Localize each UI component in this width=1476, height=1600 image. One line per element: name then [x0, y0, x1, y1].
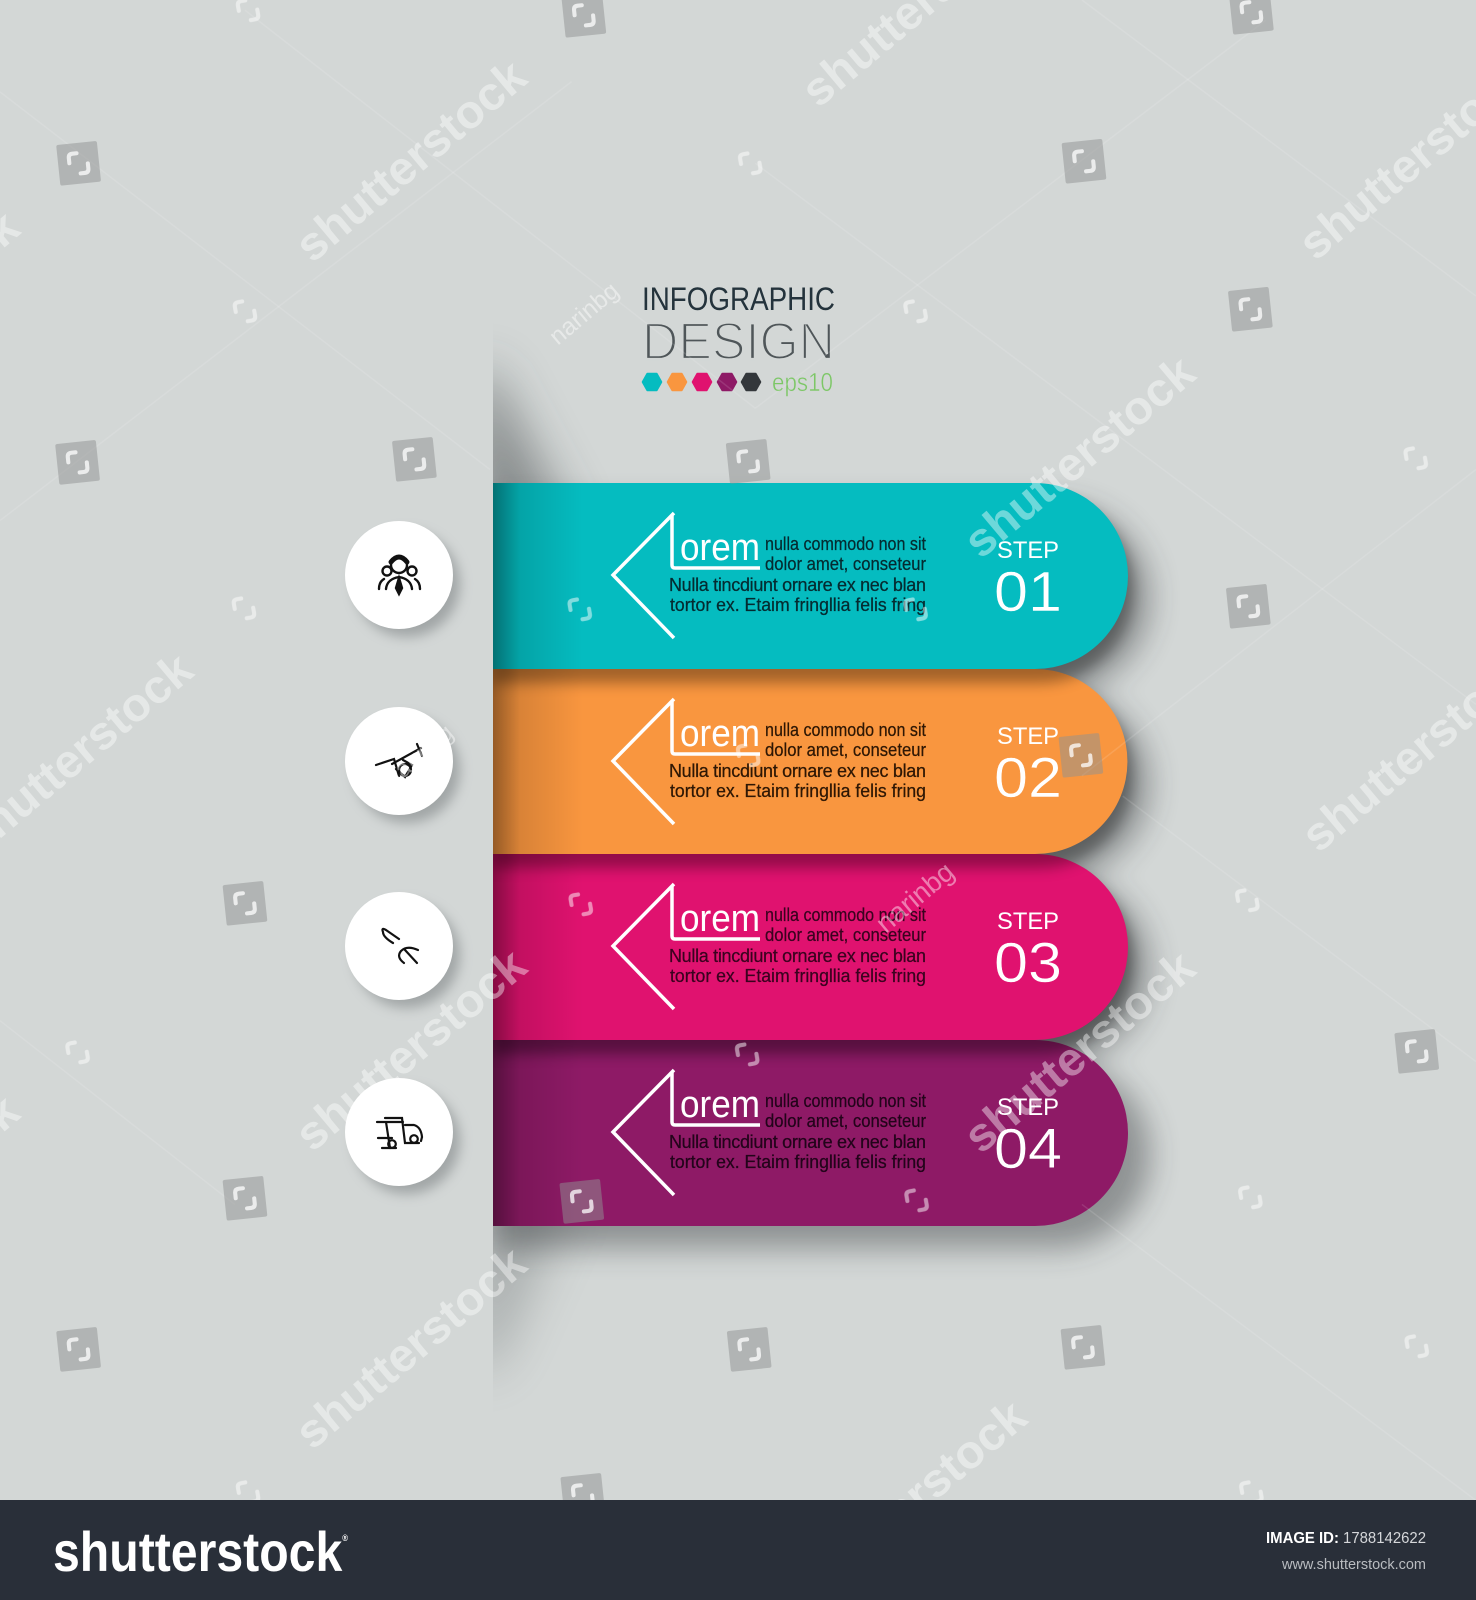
- icon circle: people: [345, 521, 460, 637]
- text: step 01 body: Nulla tincdiunt ornare ex nec blan: [669, 575, 926, 595]
- label: STEP 04: [994, 1094, 1062, 1181]
- text: step 01 body: nulla commodo non sit: [765, 534, 926, 554]
- footer logo: ®: [342, 1533, 348, 1543]
- text: step 02 body: dolor amet, conseteur: [765, 740, 926, 760]
- label: STEP 03: [994, 908, 1062, 995]
- panel: step 04 banner: [493, 1040, 1128, 1226]
- watermark overlay: narinbg: [379, 719, 459, 792]
- watermark overlay: shutterstock: [953, 344, 1205, 568]
- heading: step 04: orem: [680, 1084, 760, 1126]
- text: step 02 body: [669, 720, 926, 801]
- watermark overlay: shutterstock: [284, 1235, 537, 1459]
- text: step 04 body: Nulla tincdiunt ornare ex nec blan: [669, 1132, 926, 1152]
- icon circle: delivery truck: [345, 1078, 460, 1194]
- text: step 02 body: Nulla tincdiunt ornare ex nec blan: [669, 761, 926, 781]
- label: STEP 02: STEP: [997, 723, 1059, 750]
- icon circle: handshake: [345, 707, 460, 823]
- watermark overlay: shutterstock: [953, 939, 1205, 1163]
- label: STEP 02: 02: [994, 746, 1062, 810]
- image id: IMAGE ID: 1788142622: [1266, 1530, 1426, 1547]
- arrow: step 04: [613, 1070, 760, 1195]
- label: eps10: eps10: [772, 367, 833, 397]
- text: step 03 body: nulla commodo non sit: [765, 905, 926, 925]
- title: INFOGRAPHIC: [642, 281, 835, 317]
- footer bar: [0, 1500, 1476, 1600]
- label: STEP 01: [994, 537, 1062, 624]
- panel: step 03 banner: [493, 854, 1133, 1054]
- icon: colour hexagons: [643, 374, 760, 390]
- label: STEP 04: 04: [994, 1117, 1062, 1181]
- text: step 03 body: dolor amet, conseteur: [765, 925, 926, 945]
- text: step 04 body: [669, 1091, 926, 1172]
- text: step 03 body: Nulla tincdiunt ornare ex nec blan: [669, 946, 926, 966]
- label: STEP 03: STEP: [997, 908, 1059, 935]
- heading: step 03: orem: [680, 898, 760, 940]
- text: step 01 body: [669, 534, 926, 615]
- icon circle: plug: [345, 892, 460, 1008]
- arrow: step 02: [613, 699, 760, 824]
- label: STEP 01: 01: [994, 560, 1062, 624]
- label: STEP 02: [994, 723, 1062, 810]
- watermark overlay: narinbg: [544, 277, 624, 350]
- label: STEP 01: STEP: [997, 537, 1059, 564]
- title: [642, 281, 835, 397]
- title: DESIGN: [642, 313, 835, 371]
- footer logo: shutterstock: [53, 1520, 389, 1583]
- text: step 02 body: nulla commodo non sit: [765, 720, 926, 740]
- text: step 01 body: tortor ex. Etaim fringllia felis fring: [670, 595, 926, 615]
- text: step 03 body: tortor ex. Etaim fringllia felis fring: [670, 966, 926, 986]
- text: step 04 body: nulla commodo non sit: [765, 1091, 926, 1111]
- watermark overlay: shutterstock: [284, 937, 537, 1161]
- heading: step 02: orem: [680, 713, 760, 755]
- panel: step 02 banner: [493, 669, 1132, 868]
- arrow: step 03: [613, 884, 760, 1009]
- text: step 01 body: dolor amet, conseteur: [765, 554, 926, 574]
- left panel: [0, 0, 493, 1500]
- panel: step 01 banner: [493, 483, 1133, 683]
- text: step 03 body: [669, 905, 926, 986]
- watermark overlay: narinbg: [870, 856, 960, 939]
- label: STEP 03: 03: [994, 931, 1062, 995]
- arrow: step 01: [613, 513, 760, 638]
- panel shadow below banners: [493, 1226, 568, 1374]
- text: step 02 body: tortor ex. Etaim fringllia felis fring: [670, 781, 926, 801]
- panel shadow above banners: [493, 356, 581, 483]
- watermark overlay: shutterstock: [284, 48, 537, 272]
- label: STEP 04: STEP: [997, 1094, 1059, 1121]
- heading: step 01: orem: [680, 527, 760, 569]
- website: www.shutterstock.com: [1281, 1556, 1426, 1573]
- text: step 04 body: tortor ex. Etaim fringllia felis fring: [670, 1152, 926, 1172]
- text: step 04 body: dolor amet, conseteur: [765, 1111, 926, 1131]
- banner soft shadows: [493, 505, 1150, 1248]
